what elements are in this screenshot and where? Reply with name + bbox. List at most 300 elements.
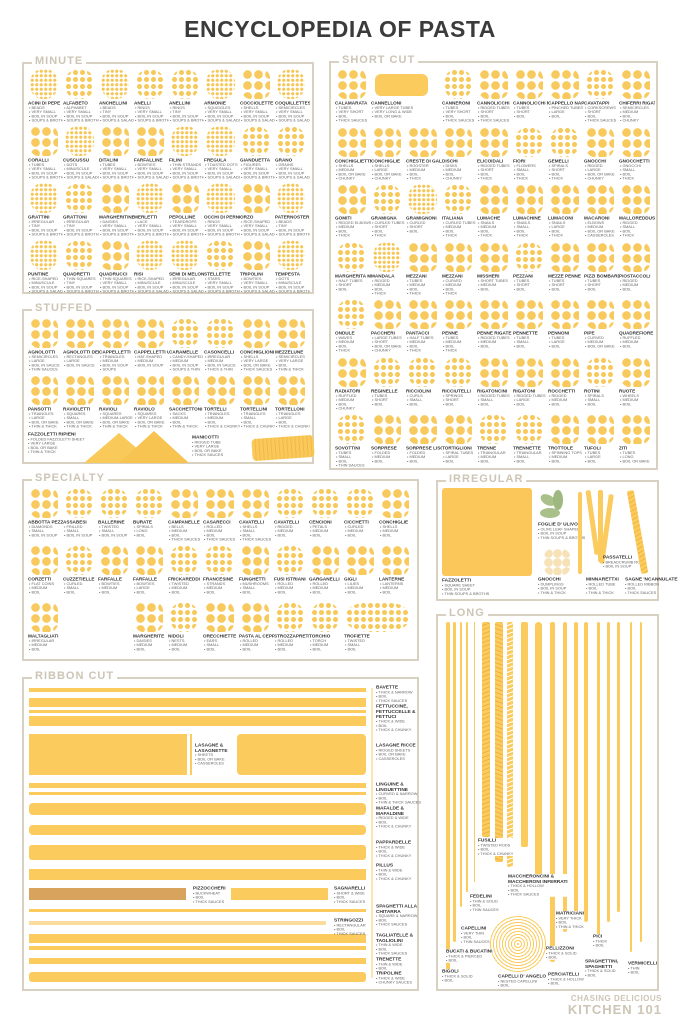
minute grid: • VERY SMALL bbox=[205, 167, 232, 171]
short cut grid: • RUFFLED bbox=[336, 394, 356, 398]
short cut grid: PENNE bbox=[442, 330, 458, 336]
ribbon labels: LASAGNE & bbox=[195, 742, 223, 748]
specialty grid: • BOIL bbox=[169, 590, 181, 595]
minute grid: • TINY bbox=[64, 224, 76, 228]
stuffed grid: • SMALL bbox=[240, 416, 256, 420]
minute grid: TEMPESTA bbox=[275, 271, 300, 277]
long labels: CAPELLINI bbox=[461, 925, 486, 931]
stuffed grid: • VERY LARGE bbox=[240, 359, 268, 363]
minute grid: • RINGS bbox=[170, 106, 185, 110]
specialty grid: NIDOLI bbox=[168, 633, 184, 639]
specialty grid: • BOIL bbox=[204, 533, 216, 538]
short cut grid: CANNELLONI bbox=[371, 100, 401, 106]
fazzoletti label: • BOIL IN SOUP bbox=[442, 587, 470, 592]
short cut grid: TRENNETTE bbox=[513, 445, 541, 451]
long labels bbox=[442, 837, 657, 988]
short cut grid: • TUBES bbox=[514, 336, 529, 340]
stuffed grid: CASONCELLI bbox=[204, 349, 234, 355]
minute grid: • BOIL IN SOUP bbox=[64, 114, 93, 119]
short cut grid: • SHORT bbox=[549, 168, 565, 172]
specialty grid: • BOIL bbox=[380, 590, 391, 595]
short cut grid: ROCCHETTI bbox=[548, 388, 575, 393]
minute grid: • VERY SMALL bbox=[240, 110, 267, 114]
short cut grid: MANDALA bbox=[371, 273, 394, 278]
stuffed grid: • BOIL OR BAKE bbox=[64, 420, 94, 425]
ribbon labels: • THICK SAUCES bbox=[334, 932, 365, 936]
stuffed grid: • BOIL bbox=[276, 363, 287, 368]
short cut grid: CAVATAPPI bbox=[584, 100, 609, 106]
long labels: MACCHERONI INFERRATI bbox=[508, 878, 568, 884]
short cut grid: • CHUNKY bbox=[585, 176, 604, 180]
short cut grid: • SHELLS bbox=[372, 164, 389, 168]
long labels: • THICK & CHUNKY bbox=[478, 852, 513, 856]
short cut grid: • MEDIUM bbox=[336, 340, 354, 344]
minute grid: COCCIOLETTE bbox=[240, 100, 273, 106]
minute grid: MERLETTI bbox=[134, 214, 157, 220]
minute grid: • BOIL IN SOUP bbox=[100, 114, 128, 119]
short cut grid: • SHORT bbox=[585, 110, 601, 114]
specialty grid: ORECCHIETTE bbox=[203, 633, 237, 639]
long labels: • THICK bbox=[593, 939, 607, 943]
short cut grid: • TUBES bbox=[514, 106, 529, 110]
icon: capelli d'angelo nest bbox=[488, 916, 548, 972]
short cut grid: • BOIL bbox=[443, 229, 454, 234]
passatelli label: • BREADCRUMB ROLL bbox=[603, 560, 644, 564]
short cut grid: • THIN SAUCES bbox=[336, 464, 365, 468]
short cut grid: • BOIL bbox=[620, 229, 632, 234]
stuffed grid: • BOIL IN SAUCE bbox=[29, 363, 60, 368]
specialty grid: FARFALLE bbox=[133, 576, 157, 582]
specialty grid: • BOIL bbox=[345, 590, 356, 595]
short cut grid: TROTTOLE bbox=[548, 445, 573, 451]
ribbon labels: PILLUS bbox=[376, 862, 393, 868]
short cut grid: • MEDIUM bbox=[336, 168, 354, 172]
minute grid: • TEARDROPS bbox=[170, 220, 197, 224]
specialty grid: • MEDIUM bbox=[310, 586, 328, 590]
stuffed grid: • VERY LARGE bbox=[276, 359, 303, 363]
specialty grid: • MEDIUM bbox=[169, 529, 188, 533]
minute grid: • GRAINS bbox=[276, 163, 293, 167]
short cut grid: • BOIL bbox=[478, 114, 490, 119]
short cut grid: • MEDIUM bbox=[585, 225, 603, 229]
long labels: SPAGHETTINI, bbox=[585, 958, 618, 964]
minute grid: • MINUSCULE bbox=[29, 281, 54, 285]
short cut grid: • BOIL bbox=[549, 229, 561, 234]
minute grid: • BOIL IN SOUP bbox=[29, 114, 57, 119]
icon: minnarettxi strands bbox=[578, 492, 582, 574]
minute grid: • VERY SMALL bbox=[205, 281, 232, 285]
short cut grid: • BOIL bbox=[407, 287, 418, 291]
stuffed grid: • LARGE bbox=[276, 416, 291, 420]
short cut grid: MEZZANI bbox=[442, 273, 462, 278]
short cut grid: • LARGE bbox=[443, 455, 458, 459]
short cut grid: • SPRINGS bbox=[443, 394, 463, 398]
short cut grid: • TUBES bbox=[585, 278, 600, 283]
minute grid: • RINGS bbox=[135, 106, 150, 110]
specialty grid: • LARGE bbox=[134, 586, 150, 590]
minute grid: • BOIL IN SOUP bbox=[276, 285, 304, 290]
short cut grid: • TUBES bbox=[443, 106, 458, 110]
specialty grid: ASSABESI bbox=[63, 519, 87, 525]
minute grid: • BOWTIES bbox=[240, 277, 261, 281]
short cut grid: • THICK bbox=[478, 176, 492, 180]
short cut grid: • SMALL bbox=[620, 168, 636, 172]
specialty grid: • THICK SAUCES bbox=[204, 538, 236, 542]
short cut grid: RUOTE bbox=[619, 388, 636, 393]
ribbon strips bbox=[29, 688, 373, 982]
minute grid: ACINI DI PEPE bbox=[28, 100, 60, 106]
short cut grid: • CHUNKY bbox=[372, 349, 390, 353]
minute grid: • TUBES bbox=[100, 163, 115, 167]
minute grid bbox=[28, 70, 310, 294]
stuffed grid: • IRREGULAR bbox=[205, 355, 230, 359]
short cut grid: • SMALL bbox=[585, 398, 600, 402]
long labels: • TWISTED RODS bbox=[478, 843, 510, 847]
minute grid: • TOASTED DOTS bbox=[205, 163, 238, 167]
minute grid: • THIN SQUARES bbox=[64, 277, 96, 281]
short cut grid: PEZZANI bbox=[513, 273, 533, 278]
stuffed grid: • SEMICIRCLES bbox=[276, 355, 305, 359]
short cut grid: • MEDIUM bbox=[443, 340, 461, 344]
specialty grid: • BOIL bbox=[380, 533, 391, 538]
specialty grid: FUNGHETTI bbox=[239, 576, 265, 582]
short cut grid: • RIDGED TUBES bbox=[514, 394, 545, 398]
minute grid: • BOIL IN SOUP bbox=[100, 285, 128, 290]
specialty grid: • ROLLED bbox=[240, 639, 258, 643]
gnocchi label: • BOIL IN SOUP bbox=[538, 586, 566, 590]
minute grid: • BOIL IN SOUP bbox=[64, 171, 93, 176]
minute grid: • BOIL IN SOUP bbox=[29, 228, 57, 233]
short cut grid: • TUBES bbox=[514, 278, 529, 283]
minute grid: • VERY SMALL bbox=[64, 110, 91, 114]
ribbon labels: LINGUETTINE bbox=[376, 786, 408, 792]
minute grid: • VERY SMALL bbox=[205, 110, 232, 114]
ribbon labels: • BOIL OR BAKE bbox=[195, 757, 225, 762]
specialty grid: • BOIL IN SOUP bbox=[99, 533, 127, 538]
ribbon labels: • THICK & WIDE bbox=[376, 845, 405, 849]
short cut grid: • SPINNING TOPS bbox=[549, 451, 582, 455]
ribbon labels: • THIN & WIDE bbox=[376, 943, 402, 947]
ribbon labels: • BOIL bbox=[376, 820, 387, 825]
ribbon labels: • THICK & NARROW bbox=[376, 690, 413, 694]
short cut grid: LUMACHE bbox=[477, 215, 500, 221]
minute grid: • VERY SMALL bbox=[276, 167, 303, 171]
specialty grid: TORCHIO bbox=[309, 633, 330, 639]
heading: minute: MINUTE bbox=[35, 55, 83, 67]
specialty grid: • SHELLS bbox=[240, 525, 257, 529]
ribbon labels: • CASSEROLES bbox=[376, 756, 405, 761]
specialty grid: STROZZAPRETI bbox=[274, 633, 309, 639]
ribbon labels: SPAGHETTI ALLA bbox=[376, 903, 417, 909]
minute grid: • IRREGULAR bbox=[64, 220, 89, 224]
short cut grid: • BOIL bbox=[549, 402, 561, 406]
minute grid: • VERY SMALL bbox=[205, 224, 232, 228]
specialty grid: CORZETTI bbox=[28, 576, 51, 582]
ribbon labels: TAGLIATELLE & bbox=[376, 932, 413, 938]
specialty grid: FRANCESINE bbox=[203, 576, 234, 582]
short cut grid: • SHELLS bbox=[336, 164, 353, 168]
short cut grid: • THICK bbox=[549, 176, 563, 180]
stuffed grid: AGNOLOTTI bbox=[28, 349, 55, 355]
short cut grid: • MEDIUM bbox=[407, 168, 425, 172]
stuffed grid: • SEMICIRCLES bbox=[29, 355, 58, 359]
specialty grid: LANTERNE bbox=[379, 576, 404, 582]
short cut grid: • SMALL bbox=[478, 398, 493, 402]
short cut grid: • BOIL bbox=[478, 344, 490, 349]
minute grid: • THIN STRANDS bbox=[170, 163, 201, 167]
short cut grid: CALAMARATA bbox=[335, 100, 367, 106]
minute grid: PUNTINE bbox=[28, 271, 48, 277]
short cut grid: MEZZANI bbox=[406, 273, 427, 278]
stuffed grid: • SQUARES bbox=[100, 412, 121, 416]
specialty grid: • BOIL bbox=[240, 590, 251, 595]
short cut grid: • THICK bbox=[478, 234, 492, 238]
long labels: SPAGHETTI bbox=[585, 964, 612, 969]
stuffed grid: • BOIL bbox=[240, 420, 252, 425]
minute grid: • VERY SMALL bbox=[100, 281, 126, 285]
long labels: • BOIL bbox=[548, 981, 559, 986]
short cut grid: • MEDIUM bbox=[407, 340, 425, 344]
short cut grid: • SMALL bbox=[620, 225, 636, 229]
short cut grid: • VERY SHORT bbox=[336, 110, 364, 114]
ribbon labels: LASAGNE RICCE bbox=[376, 742, 416, 748]
ribbon labels: • BOIL bbox=[334, 927, 345, 932]
specialty grid: • MEDIUM bbox=[99, 586, 117, 590]
heading: stuffed: STUFFED bbox=[35, 302, 93, 314]
short cut grid: • PINCHED TUBES bbox=[549, 106, 583, 110]
short cut grid: • CHUNKY bbox=[443, 176, 462, 180]
ribbon labels: • BUCKWHEAT bbox=[193, 891, 220, 895]
specialty grid: • BOIL bbox=[275, 647, 286, 652]
short cut grid: • BOIL bbox=[514, 229, 525, 234]
short cut grid: • BOIL bbox=[478, 229, 490, 234]
minute grid: • VERY SMALL bbox=[240, 167, 267, 171]
minute grid: • THIN SQUARES bbox=[100, 277, 131, 281]
icon: fazzoletti triangles bbox=[84, 431, 189, 463]
short cut grid: • MEDIUM bbox=[336, 398, 354, 402]
specialty grid: • FLAT COINS bbox=[29, 582, 54, 586]
short cut grid: • BOIL bbox=[514, 114, 525, 119]
short cut grid: • THICK SAUCES bbox=[585, 119, 616, 123]
short cut grid: • LARGE bbox=[549, 225, 565, 229]
minute grid: • TUBES bbox=[29, 163, 44, 167]
short cut grid: • LARGE TUBES bbox=[372, 336, 401, 340]
specialty grid: FRICKAREDDI bbox=[168, 576, 200, 582]
manicotti: • BOIL OR BAKE bbox=[192, 448, 222, 453]
specialty grid: • BOIL bbox=[134, 647, 146, 652]
long labels: • BOIL bbox=[498, 983, 509, 988]
minute grid: ORZO bbox=[240, 214, 253, 220]
short cut grid: • BOIL bbox=[407, 172, 418, 176]
long labels: • THIN SAUCES bbox=[461, 940, 490, 944]
specialty grid: • THICK SAUCES bbox=[240, 538, 271, 542]
short cut grid: • SHORT bbox=[549, 283, 565, 287]
icon: sagne 'ncannulate bbox=[627, 490, 648, 574]
specialty grid: CUZZETIELLE bbox=[63, 576, 95, 582]
long labels: CAPELLI D' ANGELO bbox=[498, 973, 546, 979]
specialty grid: • TORCH bbox=[310, 639, 326, 643]
short cut grid: • BOIL bbox=[407, 402, 418, 406]
specialty grid: • BOIL bbox=[275, 533, 286, 538]
specialty grid: • ROLLED bbox=[275, 582, 293, 586]
short cut grid: MEZZE PENNE bbox=[548, 273, 581, 278]
specialty grid: • TWISTED bbox=[345, 639, 365, 643]
stuffed grid: • SOUPS & THIN bbox=[170, 368, 200, 372]
ribbon labels: • THICK & CHUNKY bbox=[376, 876, 411, 881]
minute grid: • BOIL IN SOUP bbox=[135, 228, 163, 233]
heading: specialty: SPECIALTY bbox=[35, 472, 105, 484]
stuffed grid: • THICK & THIN bbox=[205, 368, 233, 372]
long labels: BIGOLI bbox=[442, 968, 459, 974]
ribbon labels: CHITARRA bbox=[376, 908, 401, 914]
minute grid: • SEMICIRCLES bbox=[276, 106, 305, 110]
ribbon labels: • BOIL bbox=[376, 694, 387, 698]
specialty grid: • BOIL bbox=[99, 590, 111, 595]
minute grid: TRIPOLINI bbox=[240, 271, 262, 277]
short cut grid: • THICK bbox=[620, 176, 635, 180]
minute grid: • BOIL IN SOUP bbox=[170, 171, 198, 176]
long labels: • BOIL bbox=[585, 973, 596, 978]
short cut grid: TUFOLI bbox=[584, 445, 601, 451]
icon: gnocchi bbox=[544, 549, 570, 575]
minute grid: • BOIL IN SOUP bbox=[276, 114, 304, 119]
short cut grid: • BOIL bbox=[514, 459, 525, 464]
specialty grid: • BOIL bbox=[275, 590, 286, 595]
specialty grid: • MEDIUM bbox=[29, 586, 47, 590]
specialty grid: • MEDIUM bbox=[310, 643, 328, 647]
short cut grid: • BOIL bbox=[336, 114, 347, 119]
minute grid: • FIGURES bbox=[240, 163, 260, 167]
ribbon labels: • THICK SAUCES bbox=[193, 900, 224, 904]
short cut grid: • LARGE bbox=[549, 340, 565, 344]
stuffed grid: • LARGE bbox=[29, 359, 45, 363]
short cut grid: GEMELLI bbox=[548, 158, 569, 163]
short cut grid: • MEDIUM bbox=[585, 340, 603, 344]
short cut grid: • BOIL OR BAKE bbox=[372, 114, 401, 119]
short cut grid: • SNAILS bbox=[549, 221, 566, 225]
short cut grid: • THICK bbox=[407, 176, 421, 180]
sagne label bbox=[625, 576, 678, 595]
short cut grid: • SMALL bbox=[514, 168, 529, 172]
stuffed grid: • BOIL IN SAUCE bbox=[64, 363, 95, 368]
minute grid: • VERY SMALL bbox=[29, 110, 56, 114]
panel: long bbox=[436, 614, 659, 991]
minute grid: • BOIL IN SOUP bbox=[205, 228, 234, 233]
specialty grid: • BOIL bbox=[240, 533, 251, 538]
short cut grid: • CHUNKY bbox=[336, 406, 355, 410]
stuffed grid: • RECTANGLES bbox=[64, 355, 93, 359]
short cut grid: • BOIL bbox=[620, 344, 632, 349]
short cut grid: • RUFFLED bbox=[620, 336, 641, 340]
long labels: • BOIL bbox=[556, 920, 567, 924]
short cut grid: • BOIL bbox=[549, 344, 561, 349]
specialty grid: • IRREGULAR bbox=[29, 639, 54, 643]
short cut grid: • SHORT TUBES bbox=[478, 278, 508, 283]
specialty grid: • BOIL IN SOUP bbox=[29, 533, 57, 538]
minute grid: • BOWTIES bbox=[135, 163, 155, 167]
short cut grid: • BOIL OR BAKE bbox=[585, 344, 614, 349]
long labels: PERCIATELLI bbox=[548, 971, 579, 977]
short cut grid: • THICK bbox=[336, 234, 350, 238]
long labels: • BOIL bbox=[508, 888, 519, 893]
minute grid: PEPOLLINE bbox=[169, 214, 195, 220]
stuffed grid: TORTELLI bbox=[204, 406, 227, 412]
short cut grid: • MEDIUM bbox=[443, 225, 461, 229]
specialty grid: • MEDIUM bbox=[345, 586, 363, 590]
short cut grid: MALLOREDDUS bbox=[619, 215, 655, 221]
short cut grid: • THICK bbox=[372, 291, 386, 295]
long labels: • THICK & PIERCED bbox=[446, 954, 482, 958]
ribbon labels: • THICK & CHUNKY bbox=[376, 825, 411, 829]
short cut grid: • SHORT bbox=[514, 283, 530, 287]
short cut grid: RICCIOLINI bbox=[406, 388, 431, 393]
specialty grid bbox=[28, 488, 409, 652]
short cut grid: • FOLDED bbox=[407, 451, 425, 455]
long labels: • THIN & THICK bbox=[556, 924, 584, 929]
specialty grid: • ROLLED bbox=[310, 582, 328, 586]
short cut grid: PACCHERI bbox=[371, 330, 394, 336]
minute grid: • TINY bbox=[276, 224, 287, 228]
short cut grid: • SEMICIRCLES bbox=[620, 106, 649, 110]
short cut grid: • BOIL bbox=[514, 172, 525, 176]
short cut grid: • MEDIUM bbox=[372, 455, 390, 459]
ribbon labels: LINGUINE & bbox=[376, 781, 404, 787]
stuffed grid: • THICK SAUCES bbox=[240, 368, 272, 372]
short cut grid: PENNE RIGATE bbox=[477, 330, 512, 336]
short cut grid: • WHEELS bbox=[620, 394, 639, 398]
short cut grid: • TRIANGULAR bbox=[478, 451, 506, 455]
specialty grid: • MEDIUM bbox=[380, 586, 398, 590]
short cut grid: • CURLED TUBES bbox=[372, 221, 404, 225]
gnocchi label bbox=[538, 576, 566, 595]
short cut grid: • SMALL bbox=[336, 455, 351, 459]
panel: short cut bbox=[329, 61, 658, 470]
short cut grid: • SHORT bbox=[514, 110, 530, 114]
short cut grid: • SMALL bbox=[514, 340, 529, 344]
specialty grid: • MEDIUM bbox=[345, 529, 363, 533]
short cut grid: • MEDIUM bbox=[478, 340, 496, 344]
short cut grid: • SPIRALS bbox=[585, 394, 604, 398]
ribbon labels: TRENETTE bbox=[376, 956, 401, 962]
ribbon labels bbox=[193, 684, 421, 984]
stuffed grid: • CANDY-SHAPED bbox=[170, 355, 203, 359]
short cut grid: • BOIL bbox=[407, 459, 418, 464]
stuffed grid: • THIN & THICK bbox=[276, 368, 304, 372]
stuffed grid: • BOIL bbox=[276, 420, 287, 425]
long strands bbox=[446, 622, 642, 969]
specialty grid: • EARS bbox=[204, 639, 218, 643]
short cut grid: • BOIL bbox=[514, 344, 525, 349]
short cut grid: • VERY LONG & WIDE bbox=[372, 110, 412, 114]
short cut grid: • TUBES bbox=[372, 394, 387, 398]
short cut grid: • BOIL bbox=[549, 459, 561, 464]
minute grid: MARGHERITINE bbox=[98, 214, 134, 220]
long labels: • BOIL bbox=[446, 958, 457, 962]
short cut grid: • RIDGED TUBES bbox=[478, 394, 510, 398]
stuffed grid: • TRIANGLES bbox=[29, 412, 53, 416]
ribbon labels: • BOIL bbox=[376, 724, 387, 728]
footer: brand bbox=[568, 994, 662, 1017]
short cut grid: • THICK bbox=[407, 291, 421, 295]
minnarettxi label: • ROLLED TUBE bbox=[586, 582, 615, 586]
short cut grid: GNOCCHETTI bbox=[619, 158, 650, 163]
short cut grid: • BOIL bbox=[620, 287, 632, 291]
ribbon labels: • THICK SAUCES bbox=[376, 698, 407, 703]
short cut grid: QUADREFIORE bbox=[619, 330, 654, 336]
short cut grid: GNOCCHI bbox=[584, 158, 606, 163]
short cut grid: • BOIL bbox=[372, 287, 383, 291]
specialty grid: • ROLLED bbox=[204, 525, 223, 529]
